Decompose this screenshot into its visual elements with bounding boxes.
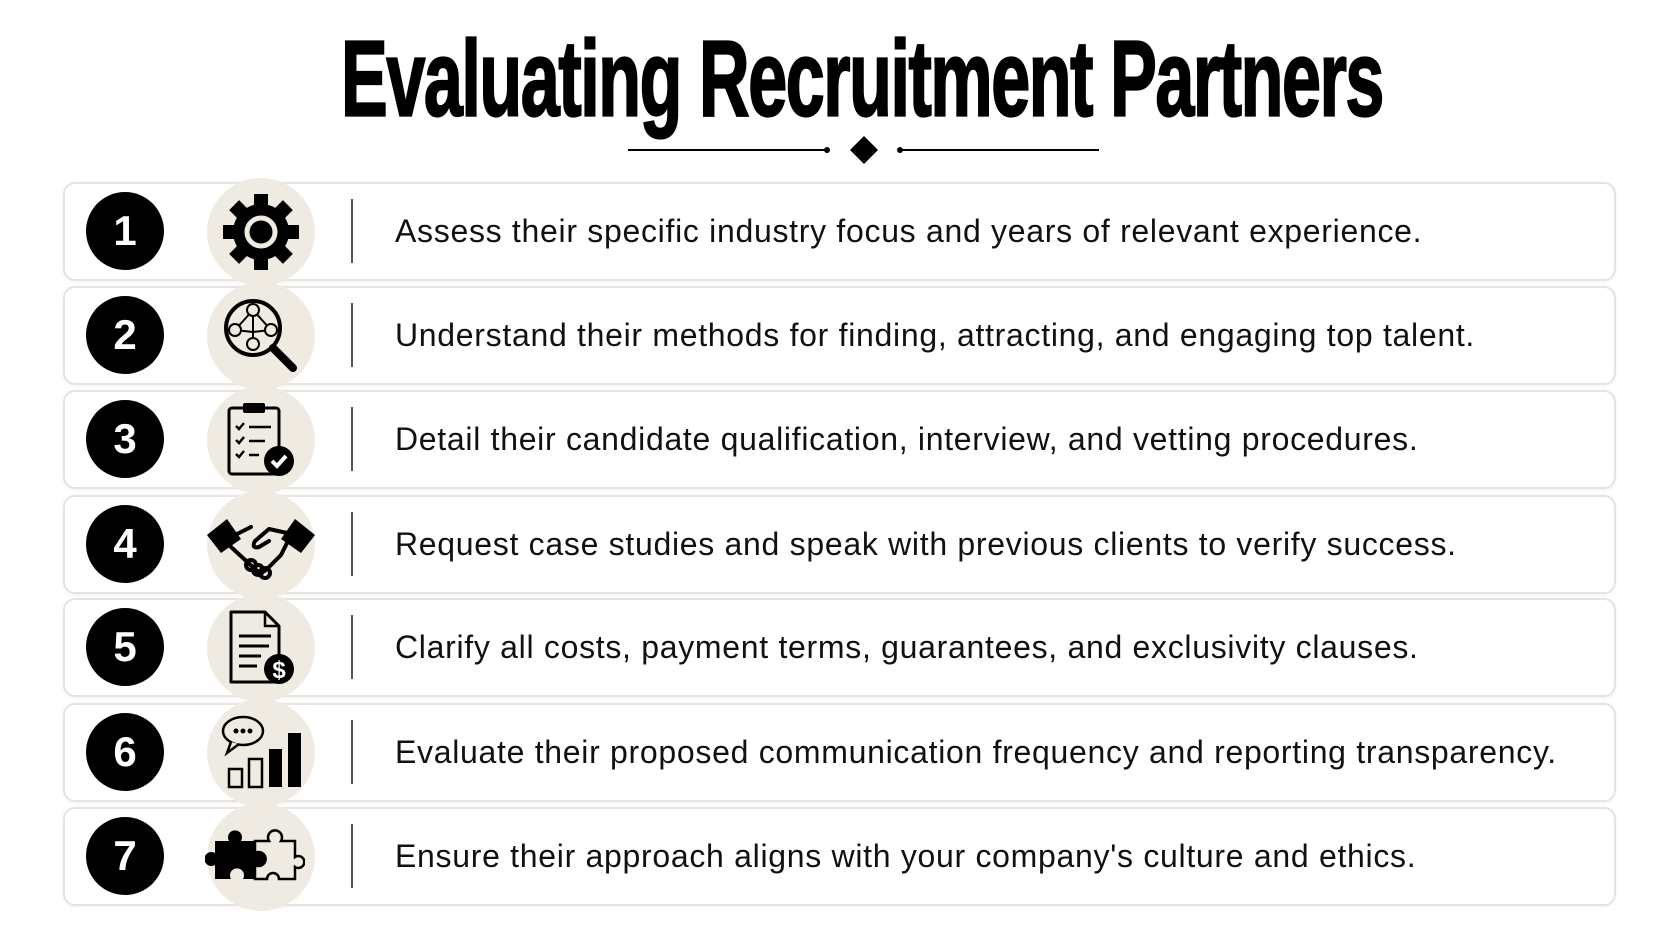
number 3: 3 xyxy=(113,415,137,462)
number 1: 1 xyxy=(113,207,137,254)
title divider xyxy=(628,136,1099,164)
number 5 xyxy=(86,608,164,686)
number 6 xyxy=(86,713,164,791)
number 2 xyxy=(86,296,164,374)
number 7: 7 xyxy=(113,832,137,879)
icon: handshake xyxy=(207,491,315,599)
row 2 xyxy=(63,286,1616,385)
number 4: 4 xyxy=(113,520,137,567)
row 6 xyxy=(63,703,1616,802)
icon: clipboard check xyxy=(207,386,315,494)
row 5 xyxy=(63,598,1616,697)
text 2: Understand their methods for finding, attracting, and engaging top talent. xyxy=(395,317,1475,353)
row 4 xyxy=(63,495,1616,594)
number 5: 5 xyxy=(113,623,137,670)
icon: document dollar: $ xyxy=(272,657,286,684)
number 2: 2 xyxy=(113,311,137,358)
number 6: 6 xyxy=(113,728,137,775)
text 5: Clarify all costs, payment terms, guarantees, and exclusivity clauses. xyxy=(395,629,1419,665)
icon: magnifier network xyxy=(207,282,315,390)
text 4: Request case studies and speak with previous clients to verify success. xyxy=(395,526,1457,562)
number 1 xyxy=(86,192,164,270)
number 3 xyxy=(86,400,164,478)
row 1 xyxy=(63,182,1616,281)
icon: document dollar xyxy=(207,594,315,702)
text 7: Ensure their approach aligns with your company's culture and ethics. xyxy=(395,838,1416,874)
text 3: Detail their candidate qualification, interview, and vetting procedures. xyxy=(395,421,1418,457)
text 6: Evaluate their proposed communication frequency and reporting transparency. xyxy=(395,734,1557,770)
icon: puzzle pieces xyxy=(207,803,315,911)
icon: gear xyxy=(207,178,315,286)
title: Evaluating Recruitment Partners xyxy=(341,19,1383,139)
row 7 xyxy=(63,807,1616,906)
row 3 xyxy=(63,390,1616,489)
text 1: Assess their specific industry focus and years of relevant experience. xyxy=(395,213,1422,249)
number 7 xyxy=(86,817,164,895)
number 4 xyxy=(86,505,164,583)
icon: chat and bars xyxy=(207,699,315,807)
